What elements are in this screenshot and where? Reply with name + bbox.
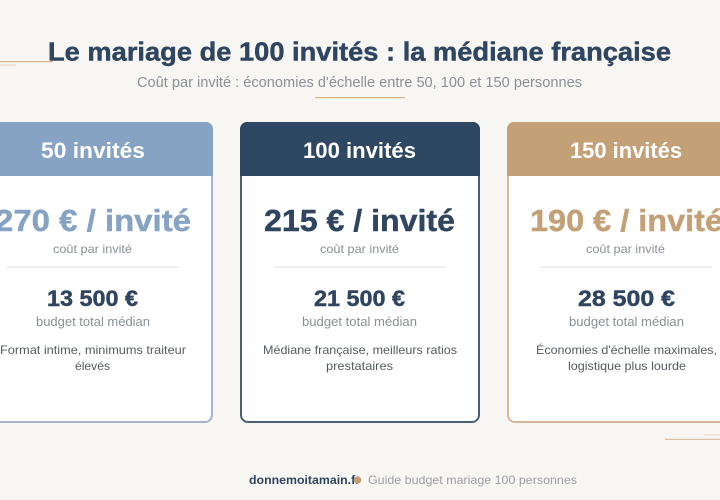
description: prestataires (326, 359, 393, 373)
budget caption: budget total médian (302, 315, 417, 329)
header: 50 invités (0, 122, 213, 176)
header: 150 invités: 150 invités (570, 138, 682, 163)
icon: brand dot (354, 476, 361, 484)
title: Le mariage de 100 invités : la médiane française (48, 36, 671, 66)
panel: 50 invités (0, 122, 213, 422)
description: Format intime, minimums traiteur (0, 343, 186, 357)
price caption: coût par invité (320, 242, 399, 256)
footer (249, 473, 577, 487)
footer caption: Guide budget mariage 100 personnes (368, 473, 577, 487)
budget caption: budget total médian (569, 315, 684, 329)
price per guest: 215 €: 215 € / invité (264, 203, 455, 238)
header: 150 invités (507, 122, 720, 176)
description: Médiane française, meilleurs ratios (263, 343, 457, 357)
panel: 150 invités (507, 122, 720, 422)
total budget: 13 500 €: 13 500 € (47, 286, 138, 311)
description (0, 343, 186, 373)
description (536, 342, 717, 373)
budget caption: budget total médian (36, 315, 150, 329)
price caption: coût par invité (586, 242, 665, 256)
subtitle: Coût par invité : économies d'échelle entre 50, 100 et 150 personnes (137, 75, 582, 91)
description: Économies d'échelle maximales, (536, 342, 717, 357)
brand name: donnemoitamain.fr (249, 473, 360, 487)
header: 100 invités: 100 invités (303, 138, 416, 163)
price per guest: 190 €: 190 € / invité (530, 203, 720, 238)
description: élevés (75, 359, 110, 373)
total budget: 21 500 €: 21 500 € (314, 286, 405, 311)
header: 100 invités (240, 122, 480, 176)
panel: 100 invités (240, 122, 480, 422)
description (263, 343, 457, 373)
header: 50 invités: 50 invités (41, 138, 145, 163)
price per guest: 270 €: 270 € / invité (0, 203, 191, 238)
description: logistique plus lourde (568, 359, 686, 373)
price caption: coût par invité (53, 242, 132, 256)
total budget: 28 500 €: 28 500 € (578, 286, 676, 311)
